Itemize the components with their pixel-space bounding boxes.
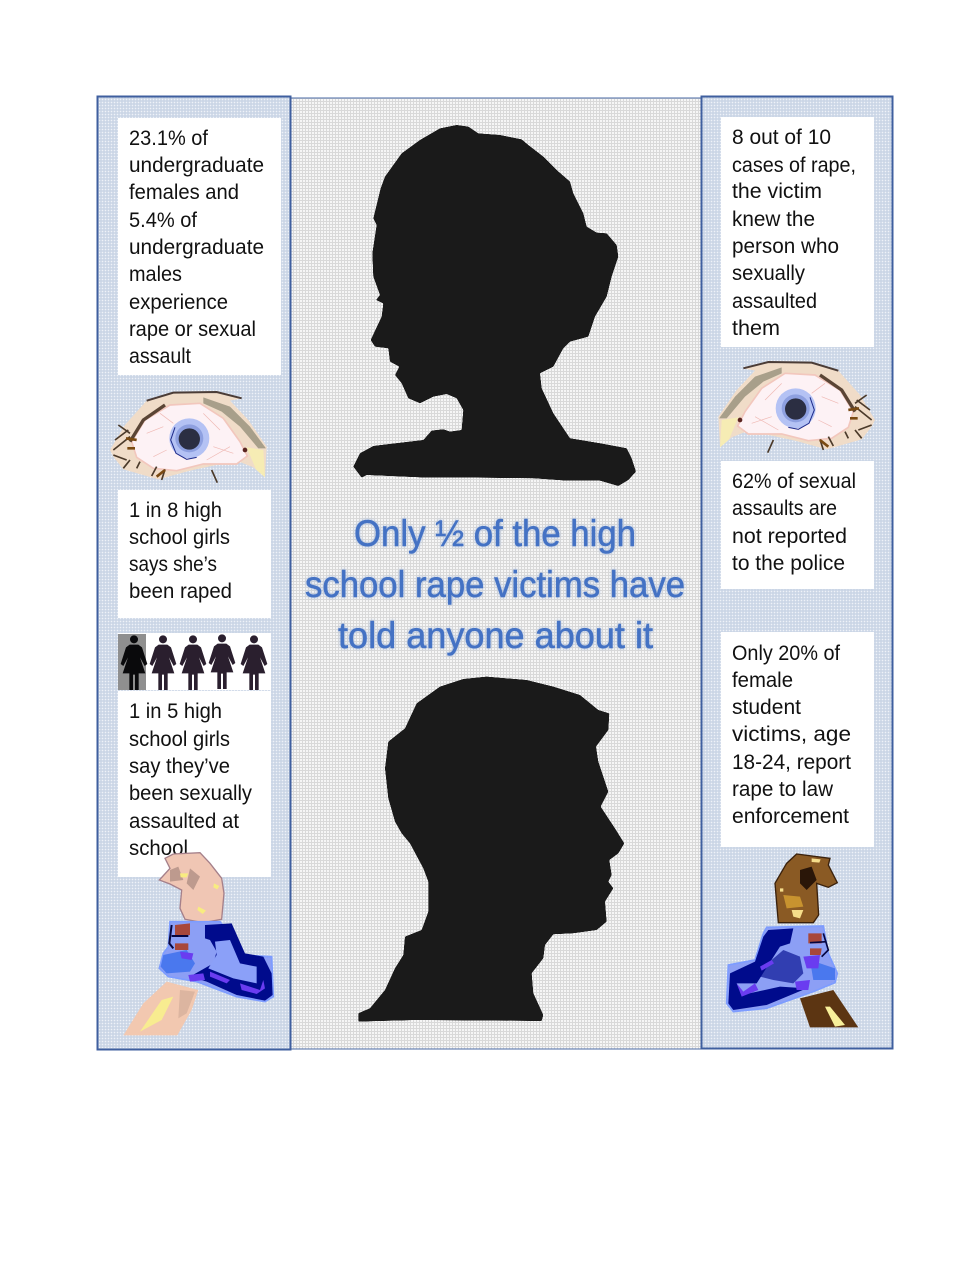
icon: left gripping hand <box>123 853 273 1035</box>
icon: right gripping hand <box>727 854 858 1027</box>
text block: 8 out of 10: assaulted <box>732 290 817 313</box>
text block: only 20 percent: enforcement <box>732 805 849 828</box>
text block: 62 percent <box>721 461 874 589</box>
text block: 8 out of 10 <box>721 117 874 347</box>
text block: 1 in 5: been sexually <box>129 782 253 805</box>
text block: 1 in 5 <box>118 691 271 877</box>
text block: 1 in 5: say they’ve <box>129 755 230 778</box>
text block: 8 out of 10: them <box>732 317 780 340</box>
text block: 8 out of 10: the victim <box>732 180 822 203</box>
silhouette: woman in profile <box>353 125 636 486</box>
text block: only 20 percent: victims, age <box>732 723 851 746</box>
text block: 62 percent: assaults are <box>732 497 837 520</box>
text block: 8 out of 10: knew the <box>732 208 815 231</box>
text block: 62 percent: 62% of sexual <box>732 470 856 493</box>
text block: 1 in 8: been raped <box>129 580 232 603</box>
text block: 1 in 5: assaulted at <box>129 810 239 833</box>
title: central message <box>305 513 685 656</box>
text block: only 20 percent: student <box>732 696 801 719</box>
text block: only 20 percent <box>721 632 874 847</box>
text block: 1 in 8: says she’s <box>129 553 217 576</box>
panel: centre background <box>291 98 701 1049</box>
text block: undergraduate statistic <box>118 118 281 375</box>
text block: 1 in 8 <box>118 490 271 618</box>
icon: left eye <box>110 392 267 483</box>
text block: undergraduate statistic: females and <box>129 181 239 204</box>
text block: 8 out of 10: cases of rape, <box>732 154 856 177</box>
text block: only 20 percent: female <box>732 669 793 692</box>
text block: only 20 percent: 18-24, report <box>732 751 851 774</box>
text block: undergraduate statistic: 23.1% of <box>129 127 208 150</box>
icon: right eye <box>718 362 875 453</box>
text block: 1 in 5: school <box>129 837 188 860</box>
text block: undergraduate statistic: undergraduate <box>129 154 264 177</box>
text block: 62 percent: to the police <box>732 552 845 575</box>
title: central message: told anyone about it <box>338 615 654 656</box>
silhouette: man in profile <box>358 677 624 1022</box>
text block: 62 percent: not reported <box>732 525 847 548</box>
title: central message: Only ½ of the high <box>354 513 636 554</box>
text block: 8 out of 10: 8 out of 10 <box>732 126 831 149</box>
text block: only 20 percent: Only 20% of <box>732 642 840 665</box>
text block: undergraduate statistic: undergraduate <box>129 236 264 259</box>
text block: undergraduate statistic: assault <box>129 345 191 368</box>
text block: 1 in 8: school girls <box>129 526 230 549</box>
text block: only 20 percent: rape to law <box>732 778 834 801</box>
panel: left statistics <box>98 96 290 1050</box>
text block: 1 in 5: 1 in 5 high <box>129 700 222 723</box>
text block: 1 in 5: school girls <box>129 728 230 751</box>
text block: undergraduate statistic: males <box>129 263 182 286</box>
panel: right statistics <box>702 96 892 1048</box>
text block: 8 out of 10: person who <box>732 235 839 258</box>
text block: undergraduate statistic: rape or sexual <box>129 318 256 341</box>
icon: five women pictogram, one highlighted <box>118 633 271 690</box>
title: central message: school rape victims have <box>305 564 685 605</box>
text block: 1 in 8: 1 in 8 high <box>129 499 222 522</box>
text block: undergraduate statistic: 5.4% of <box>129 209 197 232</box>
text block: 8 out of 10: sexually <box>732 262 806 285</box>
text block: undergraduate statistic: experience <box>129 291 228 314</box>
